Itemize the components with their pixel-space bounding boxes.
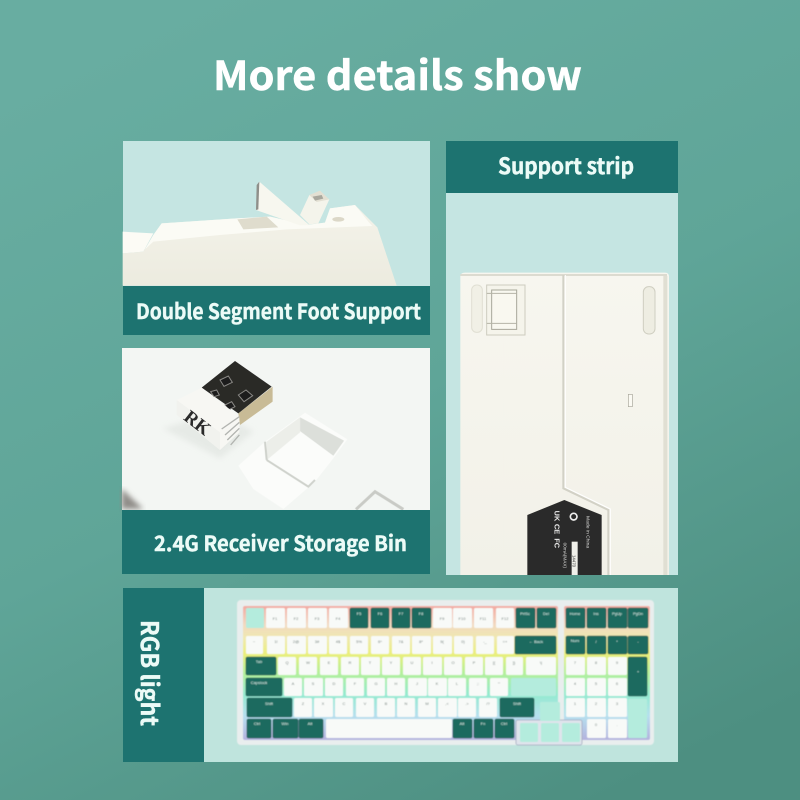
keyboard: + xyxy=(637,669,640,674)
key legends: B xyxy=(385,701,388,706)
key legends: Z xyxy=(302,701,305,706)
keyboard: Alt xyxy=(460,721,465,726)
key legends: 9 xyxy=(616,660,619,665)
illustration: keyboard underside xyxy=(460,273,669,575)
key legends: W xyxy=(306,660,310,665)
key legends: U xyxy=(411,660,414,665)
key legends: P xyxy=(473,660,476,665)
key legends: H xyxy=(395,681,398,686)
key legends: M xyxy=(425,701,429,706)
key legends: K xyxy=(436,681,439,686)
key legends: O xyxy=(451,660,455,665)
key legends: S xyxy=(312,681,315,686)
illustration: USB receiver and bin: RK xyxy=(180,406,215,440)
product label: Made in China xyxy=(585,516,591,548)
mint keycaps xyxy=(246,608,647,742)
key legends: 3# xyxy=(315,639,320,644)
keyboard xyxy=(237,600,654,745)
key legends: G xyxy=(374,681,378,686)
key legends: Q xyxy=(285,660,289,665)
keyboard: Home xyxy=(570,611,581,616)
product label: CE xyxy=(552,524,561,534)
keyboard: F5 xyxy=(357,611,362,616)
panel: double segment foot support xyxy=(123,141,430,335)
keyboard: Shift xyxy=(265,701,274,706)
key legends: F1 xyxy=(273,616,278,621)
key legends: A xyxy=(292,681,295,686)
key legends: 6^ xyxy=(378,639,382,644)
product label: 00mA(MAX) xyxy=(562,543,567,568)
key legends: .> xyxy=(465,701,469,706)
keyboard: Fn xyxy=(481,721,485,726)
key legends: 2 xyxy=(595,701,598,706)
key legends: /? xyxy=(486,701,490,706)
key legends: 4 xyxy=(574,681,577,686)
key legends: F xyxy=(354,681,357,686)
key legends: '" xyxy=(498,681,501,686)
key legends: F12 xyxy=(502,616,509,621)
key legends: 6 xyxy=(616,681,619,686)
panel: RGB light xyxy=(123,588,678,762)
key legends: =+ xyxy=(503,639,508,644)
keyboard: Del xyxy=(543,611,549,616)
keyboard: F6 xyxy=(378,611,383,616)
key legends: [{ xyxy=(493,660,496,665)
panel: support strip xyxy=(446,141,678,575)
key legends: ,< xyxy=(445,701,449,706)
key legends: F2 xyxy=(294,616,299,621)
keyboard: Win xyxy=(282,721,288,726)
keyboard: Tab xyxy=(256,659,263,664)
heading: Support strip xyxy=(498,149,634,181)
illustration: keyboard edge with folding foot xyxy=(123,182,397,286)
teal keycaps xyxy=(246,608,648,738)
keyboard: ← Back xyxy=(529,639,543,644)
keyboard: Ins xyxy=(593,611,599,616)
keyboard: PgUp xyxy=(612,611,623,616)
keyboard: F8 xyxy=(419,611,424,616)
key legends: 9( xyxy=(440,639,444,644)
key legends: L xyxy=(456,681,459,686)
key legends: J xyxy=(416,681,418,686)
key legends: 0) xyxy=(461,639,465,644)
key legends: R xyxy=(349,660,352,665)
key legends: \| xyxy=(540,660,542,665)
product label: 14470 xyxy=(572,555,577,568)
key legends: Y xyxy=(390,660,393,665)
key legends: 8 xyxy=(595,660,598,665)
key legends: C xyxy=(343,701,346,706)
key legends: F11 xyxy=(480,616,487,621)
illustration: USB receiver and bin xyxy=(122,361,403,509)
key legends: I xyxy=(431,660,433,665)
keyboard: Ctrl xyxy=(501,721,507,726)
title: More details show xyxy=(213,44,582,102)
caption: 2.4G Receiver Storage Bin xyxy=(154,528,407,558)
panel: receiver storage bin xyxy=(122,348,430,574)
key legends: 7& xyxy=(399,639,404,644)
key legends: -_ xyxy=(483,639,488,644)
key legends: F4 xyxy=(336,616,341,621)
key legends: F9 xyxy=(440,616,445,621)
key legends: 2@ xyxy=(293,639,299,644)
key legends: 5% xyxy=(356,639,362,644)
keyboard: Alt xyxy=(308,721,313,726)
white keycaps xyxy=(246,608,627,738)
key legends: ]} xyxy=(513,660,516,665)
key legends: . xyxy=(616,722,618,727)
key legends: V xyxy=(364,701,367,706)
key legends: 1! xyxy=(274,639,278,644)
key legends: E xyxy=(328,660,331,665)
key legends: 4$ xyxy=(336,639,341,644)
key legends: 7 xyxy=(574,660,577,665)
key legends: ~ xyxy=(253,639,256,644)
key legends: 5 xyxy=(595,681,598,686)
product label: UK xyxy=(552,511,561,522)
keyboard: * xyxy=(616,639,618,644)
keyboard: Capslock xyxy=(251,680,267,685)
keyboard: Ctrl xyxy=(254,721,260,726)
keyboard: F7 xyxy=(399,611,404,616)
key legends: N xyxy=(405,701,408,706)
keyboard: PgDn xyxy=(633,611,643,616)
key legends: ;: xyxy=(477,681,479,686)
keyboard: Num xyxy=(571,638,580,643)
keyboard: PrtSc xyxy=(520,611,530,616)
keyboard: Shift xyxy=(513,701,522,706)
key legends: 3 xyxy=(616,701,619,706)
keyboard: - xyxy=(637,639,639,644)
key legends: X xyxy=(322,701,325,706)
product label: FC xyxy=(552,538,561,549)
key legends: T xyxy=(369,660,372,665)
key legends xyxy=(253,616,619,727)
keyboard: / xyxy=(595,639,597,644)
key legends: D xyxy=(333,681,336,686)
key legends: 8* xyxy=(419,639,423,644)
product label xyxy=(527,500,602,575)
key legends: 0 xyxy=(595,722,598,727)
vertical heading: RGB light xyxy=(134,620,169,726)
key legends: F3 xyxy=(315,616,320,621)
key legends: F10 xyxy=(459,616,466,621)
key legends: 1 xyxy=(574,701,577,706)
caption: Double Segment Foot Support xyxy=(136,296,421,326)
